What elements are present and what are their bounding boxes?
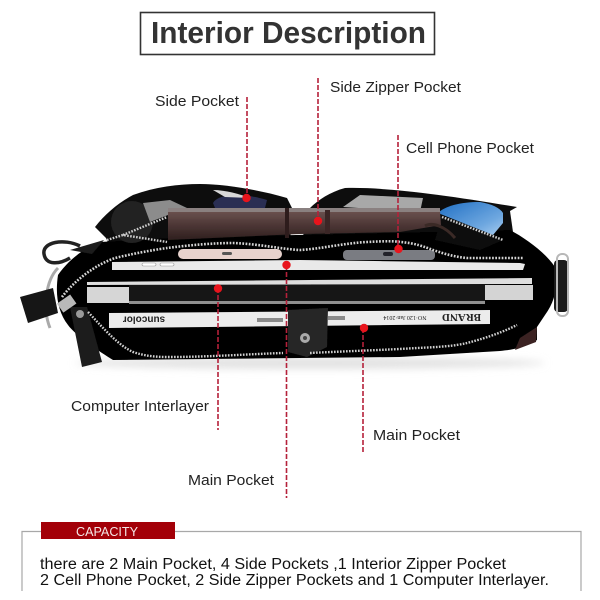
title: Interior Description <box>151 15 426 50</box>
panel: capacity <box>22 522 581 591</box>
ground shadow <box>75 357 545 369</box>
capacity text: there are 2 Main Pocket, 4 Side Pockets ,1 Interior Zipper Pocket <box>40 556 507 573</box>
callout: main pocket centre: Main Pocket <box>188 473 274 489</box>
snap tab <box>288 308 328 357</box>
sunglasses <box>435 202 503 250</box>
callout: computer interlayer: Computer Interlayer <box>71 399 209 415</box>
lower zippers <box>88 312 517 357</box>
capacity text <box>40 556 549 589</box>
panel frame <box>22 532 581 591</box>
callout: side zipper pocket: Side Zipper Pocket <box>330 80 461 96</box>
callout: cell phone pocket: Cell Phone Pocket <box>406 141 534 157</box>
magazine in main pocket: BRAND <box>442 311 481 323</box>
zipper pull lower <box>57 294 102 367</box>
zipper pull left <box>20 288 58 323</box>
capacity tag <box>41 522 175 539</box>
capacity text: 2 Cell Phone Pocket, 2 Side Zipper Pockets and 1 Computer Interlayer. <box>40 572 549 589</box>
magazine in main pocket: suncolor <box>123 314 165 324</box>
bag main body <box>57 230 556 360</box>
left strap ring and zipper loop <box>44 240 104 328</box>
grey card in back pocket <box>343 195 423 212</box>
phone bottoms <box>178 249 435 260</box>
callout: side pocket: Side Pocket <box>155 94 239 110</box>
round bottle <box>111 200 187 243</box>
laptop upper edge <box>112 260 525 270</box>
bag photograph <box>20 184 568 369</box>
capacity tag: CAPACITY <box>76 524 138 539</box>
callout: side pocket <box>155 94 251 202</box>
right flap <box>300 188 520 248</box>
left flap <box>95 184 292 248</box>
callout: computer interlayer <box>71 284 222 430</box>
navy item in side pocket <box>213 190 267 208</box>
brown base edge <box>515 327 537 350</box>
right strap ring <box>554 254 568 316</box>
callout: main pocket centre <box>188 261 291 498</box>
magazine in main pocket <box>109 310 490 328</box>
callout: main pocket right <box>360 324 460 452</box>
callout: cell phone pocket <box>394 135 534 253</box>
callout: main pocket right: Main Pocket <box>373 428 460 444</box>
computer interlayer laptop <box>87 278 533 304</box>
upper zippers <box>107 217 503 242</box>
inner main zipper <box>62 241 523 297</box>
magazine in main pocket: NO·120 Jan·2014 <box>383 314 427 320</box>
brown wallet <box>168 208 455 240</box>
callout: side zipper pocket <box>314 78 461 225</box>
